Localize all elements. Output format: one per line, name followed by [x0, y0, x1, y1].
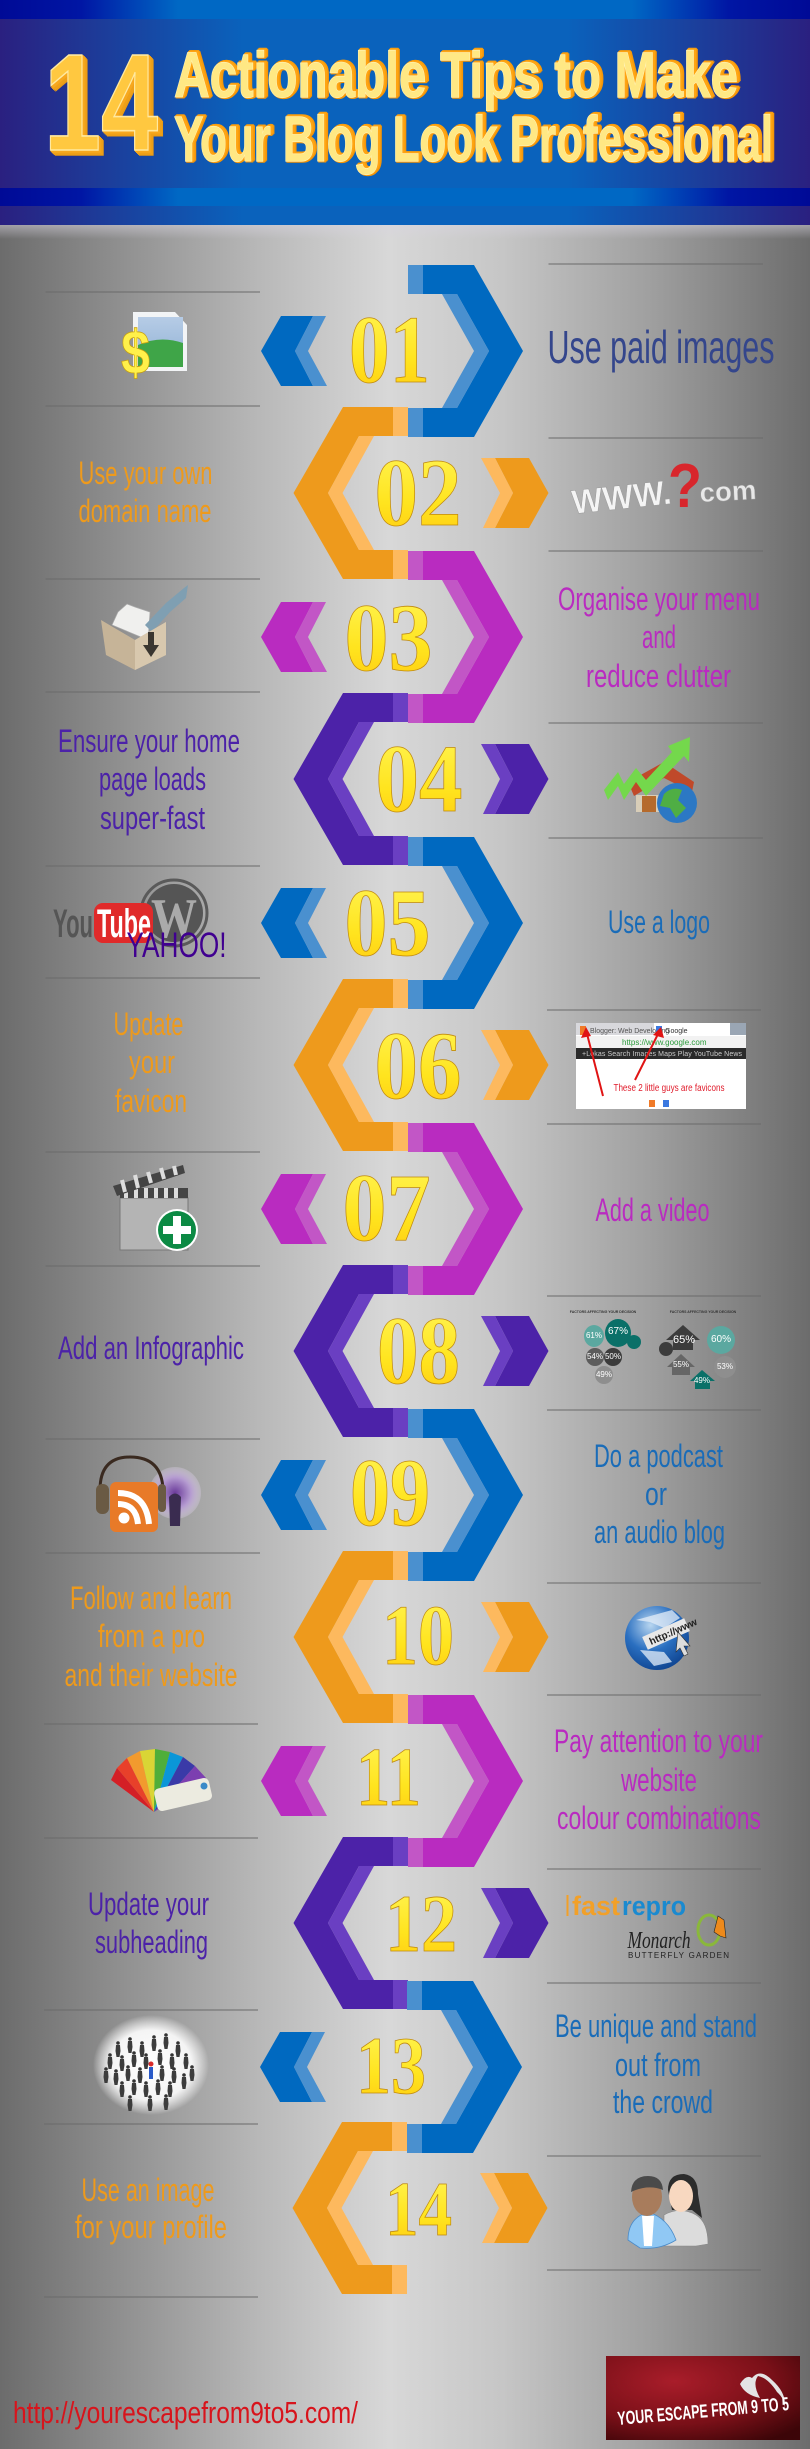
icon: house graph and globe — [604, 737, 697, 823]
text: use your own domain name — [78, 455, 212, 529]
tip 04 — [58, 693, 697, 865]
text: follow and learn from a pro: from a pro — [98, 1618, 205, 1654]
text: use your own domain name: domain name — [78, 493, 212, 529]
icon: mini infographics: FACTORS AFFECTING YOUR DECISION — [670, 1310, 737, 1314]
number 13: 13 — [356, 2020, 426, 2111]
text: follow and learn from a pro: Follow and learn — [70, 1580, 232, 1616]
text: do a podcast or an audio blog: Do a podcast — [594, 1438, 723, 1474]
text: be unique and stand out from the crowd — [555, 2008, 757, 2120]
icon: mini infographics: 49% — [694, 1376, 710, 1385]
icon: www question com: WWW. — [570, 474, 673, 522]
icon: mini infographics: 50% — [605, 1352, 621, 1361]
text: use an image for your profile: Use an image — [82, 2172, 214, 2208]
icon: mini infographics: 67% — [608, 1326, 628, 1337]
text: add an infographic: Add an Infographic — [58, 1330, 244, 1366]
number 08: 08 — [377, 1297, 460, 1404]
tip 03 — [101, 551, 760, 723]
tip 05 — [53, 837, 710, 1009]
tip 08 — [58, 1265, 737, 1437]
number 05: 05 — [344, 869, 430, 976]
text: do a podcast or an audio blog: or — [645, 1476, 667, 1512]
text: be unique and stand out from the crowd: out from — [615, 2047, 701, 2083]
text: pay attention to colours: website — [620, 1762, 697, 1798]
icon: man and woman avatars — [628, 2174, 708, 2248]
number 06: 06 — [374, 1012, 462, 1119]
icon: mini infographics: 60% — [711, 1334, 731, 1345]
icon: logos youtube wordpress yahoo: You — [53, 902, 93, 946]
text: update your favicon: your — [129, 1044, 175, 1080]
icon: www question com: ? — [668, 452, 702, 521]
tip 07 — [113, 1123, 710, 1295]
icon: fastrepro and monarch logos: BUTTERFLY GARDEN — [628, 1951, 729, 1960]
text: use an image for your profile: for your profile — [75, 2209, 227, 2245]
icon: fastrepro and monarch logos: fast — [572, 1891, 620, 1921]
text: update your subheading — [88, 1886, 209, 1960]
text: be unique and stand out from the crowd: the crowd — [613, 2084, 713, 2120]
text: add a video: Add a video — [596, 1192, 710, 1228]
text: do a podcast or an audio blog: an audio blog — [594, 1514, 725, 1550]
text: use a logo: Use a logo — [608, 904, 710, 940]
icon: browser screenshot of favicons — [576, 1023, 746, 1109]
number 02: 02 — [374, 439, 462, 546]
icon: browser screenshot of favicons: Blogger: Web Developing — [590, 1028, 669, 1035]
text: ensure your home page loads super-fast: page loads — [99, 761, 206, 797]
icon: crowd with one standing out — [93, 2015, 209, 2115]
number 10: 10 — [382, 1587, 454, 1683]
icon: logos youtube wordpress yahoo — [53, 880, 226, 965]
title: number 14: 14 — [44, 26, 158, 180]
text: ensure your home page loads super-fast — [58, 723, 240, 836]
icon: mini infographics: FACTORS AFFECTING YOUR DECISION — [570, 1310, 637, 1314]
icon: www question com: com — [699, 475, 757, 508]
icon: mini infographics: 54% — [587, 1352, 603, 1361]
icon: mini infographics: 53% — [717, 1362, 733, 1371]
icon: box with papers and scissors — [101, 585, 188, 670]
tip 06 — [114, 979, 746, 1151]
text: use your own domain name: Use your own — [78, 455, 212, 491]
number 04: 04 — [376, 725, 462, 832]
icon: globe with http label — [625, 1606, 699, 1670]
icon: fastrepro and monarch logos: repro — [622, 1891, 686, 1921]
number 11: 11 — [356, 1731, 421, 1824]
icon: mini infographics: 49% — [596, 1370, 612, 1379]
icon: browser screenshot of favicons: +Lokas Search Images Maps Play YouTube News — [582, 1051, 742, 1058]
text: update your favicon: Update — [114, 1006, 184, 1042]
text: pay attention to colours — [554, 1723, 763, 1836]
tip 01 — [121, 265, 774, 437]
number 09: 09 — [350, 1439, 430, 1546]
icon: clapperboard with plus — [113, 1165, 198, 1251]
icon: mini infographics: 55% — [673, 1360, 689, 1369]
text: organise your menu — [558, 581, 760, 694]
text: follow and learn from a pro — [64, 1580, 238, 1693]
text: update your subheading: Update your — [88, 1886, 209, 1922]
tip 02 — [78, 407, 757, 579]
icon: paid image: $ — [121, 319, 150, 388]
icon: logos youtube wordpress yahoo: YAHOO! — [126, 926, 226, 965]
icon: podcast rss headphones — [96, 1457, 201, 1532]
icon: colour swatch fan — [111, 1749, 213, 1812]
logo: your escape from 9 to 5 — [606, 2356, 800, 2440]
icon: browser screenshot of favicons: https://www.google.com — [622, 1038, 707, 1047]
number 03: 03 — [344, 584, 432, 691]
tip 14 — [75, 2122, 708, 2294]
text: ensure your home page loads super-fast: Ensure your home — [58, 723, 240, 759]
text: organise your menu: and — [642, 619, 676, 655]
icon: mini infographics: 65% — [673, 1334, 695, 1346]
text: ensure your home page loads super-fast: super-fast — [100, 800, 205, 836]
icon: mini infographics — [570, 1310, 737, 1389]
number 01: 01 — [349, 296, 430, 403]
text: follow and learn from a pro: and their website — [64, 1657, 238, 1693]
text: use an image for your profile — [75, 2172, 227, 2245]
icon: fastrepro and monarch logos — [566, 1891, 729, 1960]
tip 10 — [64, 1551, 699, 1723]
text: organise your menu: reduce clutter — [586, 658, 731, 694]
icon: globe with http label: http://www — [648, 1617, 699, 1648]
number 12: 12 — [385, 1878, 457, 1969]
tip 12 — [88, 1837, 729, 2009]
number 07: 07 — [342, 1154, 430, 1261]
text: do a podcast or an audio blog — [594, 1438, 725, 1550]
number 14: 14 — [385, 2166, 452, 2252]
text: update your favicon: favicon — [115, 1083, 187, 1119]
tip 13 — [93, 1981, 757, 2153]
header banner — [0, 0, 810, 225]
icon: www question com — [570, 452, 757, 522]
text: update your subheading: subheading — [95, 1924, 208, 1960]
footer url: http://yourescapefrom9to5.com/ — [13, 2395, 358, 2430]
icon: browser screenshot of favicons: Google — [665, 1028, 688, 1035]
tip 09 — [96, 1409, 725, 1581]
icon: fastrepro and monarch logos: Monarch — [627, 1928, 690, 1954]
icon: browser screenshot of favicons: These 2 little guys are favicons — [614, 1083, 724, 1094]
icon: logos youtube wordpress yahoo: Tube — [97, 902, 151, 946]
text: update your favicon — [114, 1006, 187, 1119]
icon: paid image — [121, 312, 187, 388]
icon: logos youtube wordpress yahoo: W — [151, 888, 197, 950]
icon: mini infographics: 61% — [586, 1331, 602, 1340]
tip 11 — [111, 1695, 763, 1867]
